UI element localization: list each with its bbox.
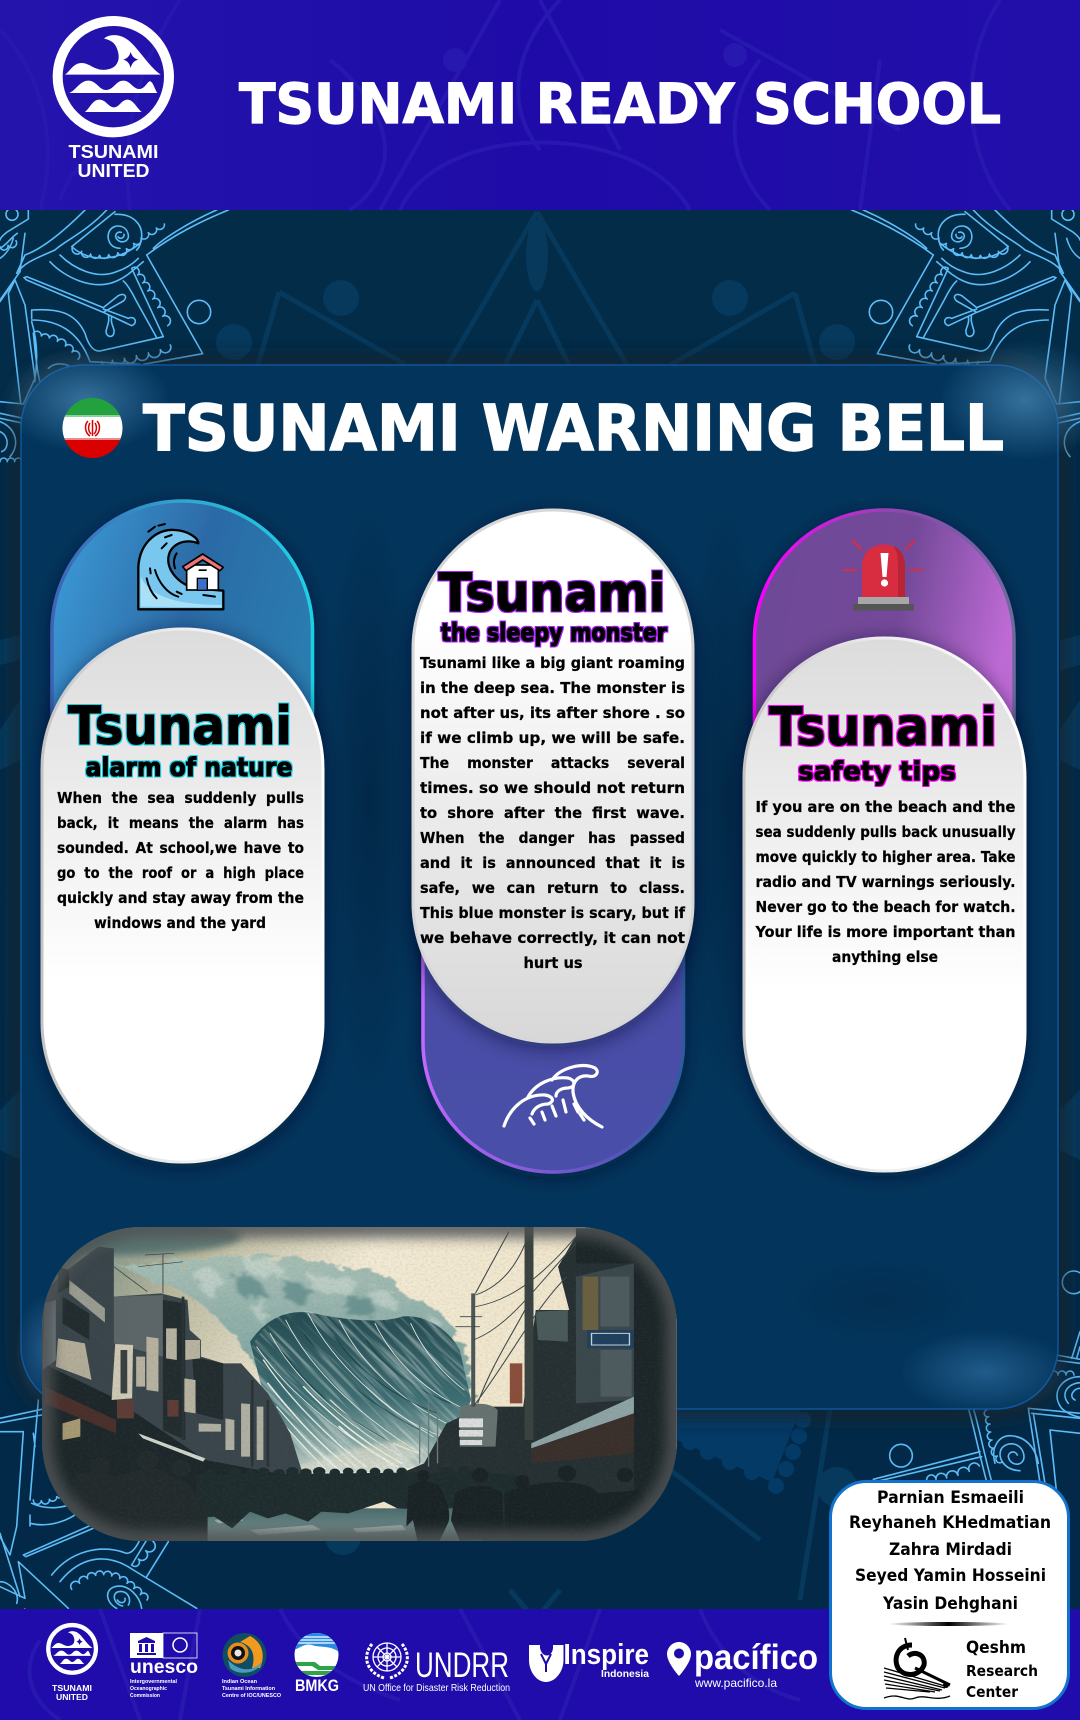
logo: UNESCO: Intergovernmental [130,1679,178,1685]
body text: in the deep sea. The monster is [420,679,685,697]
subheading: alarm of nature [86,753,292,783]
body text: go to the roof or a high place [57,864,304,882]
panel: alarm of nature [42,501,323,1162]
panel: authors [830,1482,1068,1708]
header band [0,0,1080,210]
logo: Indian Ocean Tsunami Information Centre [222,1633,281,1699]
body text [420,654,685,972]
logo: UNDRR [363,1643,510,1694]
body text [57,789,304,932]
logo: Tsunami United (footer): TSUNAMI [52,1683,92,1693]
body text: hurt us [524,954,583,972]
back pill: purple [423,760,684,1172]
logo: Indian Ocean Tsunami Information Centre: Indian Ocean [222,1679,257,1685]
body text: and it is announced that it is [420,854,685,872]
authors list: Zahra Mirdadi [889,1540,1012,1560]
icon: white waves [504,1066,602,1127]
body text: When the sea suddenly pulls [57,789,304,807]
logo: Qeshm Research Center: Qeshm [966,1638,1026,1658]
logo: pacifico: www.pacifico.la [694,1676,777,1690]
body text: Your life is more important than [755,923,1016,941]
panel: main content background [0,340,1080,1414]
body text [755,798,1016,966]
panel: the sleepy monster [413,510,693,1172]
logo: BMKG [294,1633,339,1695]
logo: pacifico [667,1638,818,1690]
body text: sea suddenly pulls back unusually [756,823,1016,841]
body text: we behave correctly, it can not [420,929,685,947]
subheading: safety tips [798,757,956,787]
subheading: the sleepy monster [441,618,668,647]
front pill: white [413,510,693,1042]
street [208,1508,473,1541]
body text: to shore after the first wave. [420,804,685,822]
body text: This blue monster is scary, but if [420,904,685,922]
foreground figures [74,1514,208,1541]
logo: UNESCO: Oceanographic [130,1686,167,1692]
logo: UNDRR: UNDRR [415,1646,509,1685]
authors list: Parnian Esmaeili [877,1488,1024,1508]
logo: Indian Ocean Tsunami Information Centre: Centre of IOC/UNESCO [222,1693,281,1699]
title: Tsunami Warning Bell: TSUNAMI WARNING BELL [143,392,1004,465]
logo: pacifico: pacífico [694,1638,818,1677]
logo: Tsunami United (header) [58,21,169,181]
icon: wave and house [138,524,223,609]
icon: red siren [843,540,923,610]
logo: Tsunami United (header): UNITED [78,161,150,181]
logo: UNESCO: Commission [130,1693,160,1699]
body text: Tsunami like a big giant roaming [420,654,685,672]
body text: radio and TV warnings seriously. [756,873,1016,891]
logo: BMKG: BMKG [295,1676,339,1695]
body text: windows and the yard [94,914,266,932]
panel: safety tips [744,510,1025,1171]
logo: Tsunami United (footer): UNITED [56,1692,88,1702]
main panel shadow [14,358,1066,1418]
logo: UInspire Indonesia: Indonesia [601,1669,649,1680]
body text: sounded. At school,we have to [57,839,304,857]
image: giant wave over a crowded street [9,1072,706,1720]
authors list: Seyed Yamin Hosseini [855,1566,1046,1586]
logo: UNDRR: UN Office for Disaster Risk Reduction [363,1683,510,1694]
body text: The monster attacks several [420,754,685,772]
body text: if we climb up, we will be safe. [420,729,685,747]
back pill: blue [52,501,312,841]
body text: anything else [832,948,938,966]
body text: Never go to the beach for watch. [756,898,1016,916]
logo: UNESCO [130,1633,198,1699]
title: Tsunami Ready School: TSUNAMI READY SCHOOL [239,72,1001,136]
icon: Iran flag [62,398,122,458]
heading: Tsunami [769,697,997,758]
body text: quickly and stay away from the [57,889,304,907]
logo: Indian Ocean Tsunami Information Centre: Tsunami Information [222,1686,275,1692]
body text: When the danger has passed [420,829,685,847]
logo: Tsunami United (footer) [48,1625,96,1702]
body text: times. so we should not return [420,779,685,797]
logo: Tsunami United (header): TSUNAMI [68,142,158,162]
authors list: Reyhaneh KHedmatian [849,1513,1051,1533]
logo: UInspire Indonesia [529,1639,649,1682]
body text: not after us, its after shore . so [420,704,685,722]
body text: move quickly to higher area. Take [756,848,1016,866]
logo: UInspire Indonesia: Inspire [564,1639,649,1671]
left buildings [36,1247,304,1547]
heading: Tsunami [438,563,666,624]
heading: Tsunami [68,696,292,757]
authors list [849,1488,1051,1614]
right buildings [393,1228,676,1547]
authors list: Yasin Dehghani [882,1594,1018,1614]
front pill: white [42,629,323,1162]
front pill: white [744,638,1025,1171]
footer band [0,1609,1080,1720]
crowd [196,1472,527,1528]
logo: UNESCO: unesco [130,1657,198,1678]
logo: Qeshm Research Center [884,1638,1038,1701]
body text: safe, we can return to class. [420,879,685,897]
back pill: violet [754,510,1014,850]
logo: Qeshm Research Center: Center [966,1683,1019,1701]
body text: If you are on the beach and the [756,798,1016,816]
logo: Qeshm Research Center: Research [966,1662,1038,1680]
body text: back, it means the alarm has [57,814,304,832]
